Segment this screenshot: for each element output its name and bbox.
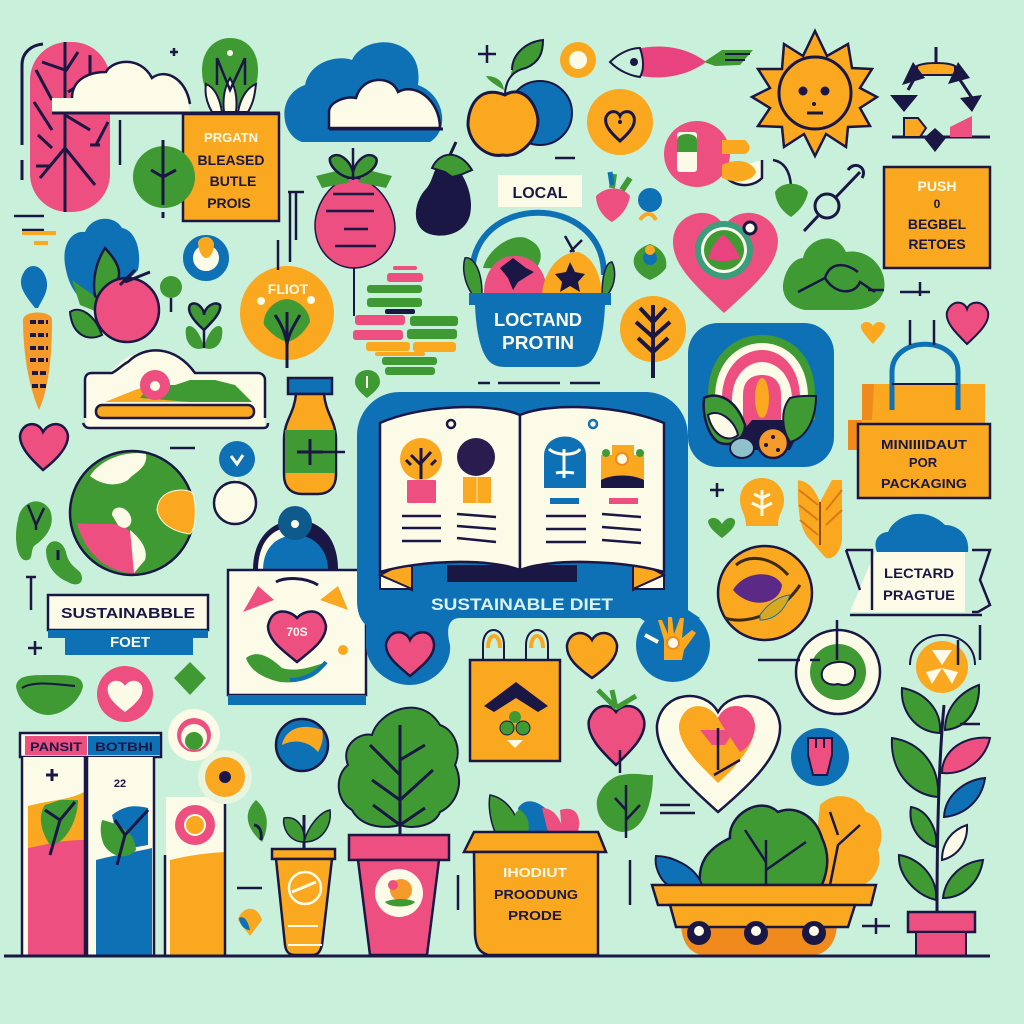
icon: yellow heart circle [587, 89, 653, 155]
icon: sun [752, 31, 877, 156]
icon: tall plant right [892, 685, 990, 956]
icon: pink heart left [20, 424, 68, 470]
label: lectard prague cloud: LECTARD [884, 565, 954, 581]
bar chart: BOTBHI [95, 740, 153, 754]
icon: green bush [783, 239, 885, 310]
icon: produce box: IHODIUT [503, 865, 567, 880]
icon: blue ring [188, 237, 224, 276]
panel: sustainable diet book: SUSTAINABLE DIET [431, 595, 614, 614]
icon: heart emblem [657, 696, 780, 812]
panel: yellow label push: PUSH [918, 178, 956, 194]
icon: globe [70, 451, 195, 575]
icon: heart pink right [947, 303, 988, 344]
label: sustainable foet [48, 595, 208, 655]
panel: yellow label protein: PROIS [207, 195, 251, 211]
icon: small leaf [248, 800, 267, 842]
icon: green diamond [174, 662, 206, 695]
icon: small multicolour sprout [238, 909, 262, 936]
icon: juice bottle [284, 378, 336, 494]
icon: pink heart circle [97, 666, 153, 722]
icon: white cloud [52, 62, 280, 113]
icon: green pear leaf [597, 774, 653, 838]
icon: pink heart emblem [673, 213, 778, 313]
icon: produce box [464, 795, 606, 955]
panel: yellow label push: BEGBEL [908, 216, 967, 232]
ground line [4, 954, 990, 958]
icon: yellow wheat circle [620, 296, 686, 378]
bar chart: PANSIT [30, 740, 83, 754]
label: sustainable foet: FOET [110, 634, 150, 651]
label: sustainable foet: SUSTAINABBLE [61, 605, 195, 622]
icon: fish [610, 47, 753, 77]
panel: sustainable diet book [357, 392, 710, 685]
icon: green leaf pair [186, 303, 222, 349]
small yellow dashes [22, 233, 56, 243]
icon: green pin [160, 276, 182, 312]
icon: hand circle [645, 617, 696, 660]
label: local [498, 175, 582, 207]
icon: strawberry heart [589, 690, 644, 765]
icon: rainbow tile [688, 323, 834, 467]
bar chart: 22 [114, 778, 126, 790]
panel: yellow label protein: BUTLE [210, 173, 256, 189]
icon: fruit circle: FLIOT [268, 281, 309, 297]
icon: carrot [21, 266, 52, 410]
icon: yellow shopping bag [470, 630, 560, 761]
panel: yellow label push [884, 167, 990, 268]
label: local: LOCAL [512, 185, 568, 202]
icon: radiation circle [910, 635, 975, 693]
icon: small blue and green dots [634, 188, 666, 280]
icon: local basket: PROTIN [502, 333, 574, 353]
icon: bush planter cart [652, 796, 882, 955]
icon: shopping bag with heart: 70S [286, 625, 308, 639]
icon: flower and green disc [168, 709, 252, 804]
panel: packaging bag: PACKAGING [881, 476, 967, 491]
icon: local basket: LOCTAND [494, 310, 582, 330]
icon: blue plant with pink apple [64, 219, 159, 342]
icon: green leaf and lens [773, 160, 864, 231]
icon: green lips leaf [16, 675, 83, 715]
panel: yellow label push: 0 [934, 197, 941, 211]
icon: globe badge [276, 719, 328, 771]
panel: yellow label protein: PRGATN [204, 130, 258, 145]
icon: pink radish [315, 148, 395, 316]
panel: yellow label protein [183, 114, 279, 221]
icon: green leaf circle [133, 140, 195, 218]
icon: fruit circle [240, 266, 334, 368]
icon: shopping bag with heart [228, 506, 366, 705]
icon: small yellow heart [861, 322, 885, 344]
icon: wheat ear [798, 480, 842, 558]
icon: produce box: PRODE [508, 908, 562, 923]
icon: pink circle with mug [664, 121, 762, 187]
label: lectard prague cloud [846, 514, 990, 615]
icon: green small heart [708, 518, 735, 538]
icon: big tree in pink pot [339, 708, 459, 955]
icon: small flower [560, 42, 596, 78]
icon: yellow circle badge [718, 546, 812, 640]
icon: blue cloud [284, 42, 443, 142]
icon: yellow seed badge [740, 478, 784, 526]
label: lectard prague cloud: PRAGTUE [883, 587, 955, 603]
icon: pink brain tree [22, 42, 110, 212]
icon: blue and cream rings [214, 441, 256, 524]
icon: food tray [83, 350, 268, 428]
icon: yellow heart mid [567, 633, 617, 678]
icon: green face circle [796, 630, 880, 714]
icon: pink heart mid [386, 632, 434, 676]
panel: yellow label push: RETOES [908, 236, 966, 252]
icon: layered stripes [353, 266, 458, 375]
icon: local basket [464, 213, 615, 367]
panel: yellow label protein: BLEASED [198, 152, 264, 168]
icon: blue fist circle [791, 728, 849, 786]
icon: produce box: PROODUNG [494, 887, 578, 902]
icon: apples [468, 40, 572, 155]
panel: packaging bag: POR [909, 455, 938, 470]
icon: pin marker [355, 370, 380, 398]
panel: packaging bag: MINIIIIDAUT [881, 437, 967, 452]
bar chart [20, 733, 225, 955]
icon: green blobs left [16, 501, 82, 584]
icon: recycle arrows [890, 47, 990, 152]
icon: yellow cup plant [272, 810, 335, 955]
panel: packaging bag [848, 344, 990, 498]
icon: pink shield leaf [596, 172, 630, 222]
icon: green leafy plant [202, 38, 258, 112]
icon: eggplant [416, 142, 472, 236]
